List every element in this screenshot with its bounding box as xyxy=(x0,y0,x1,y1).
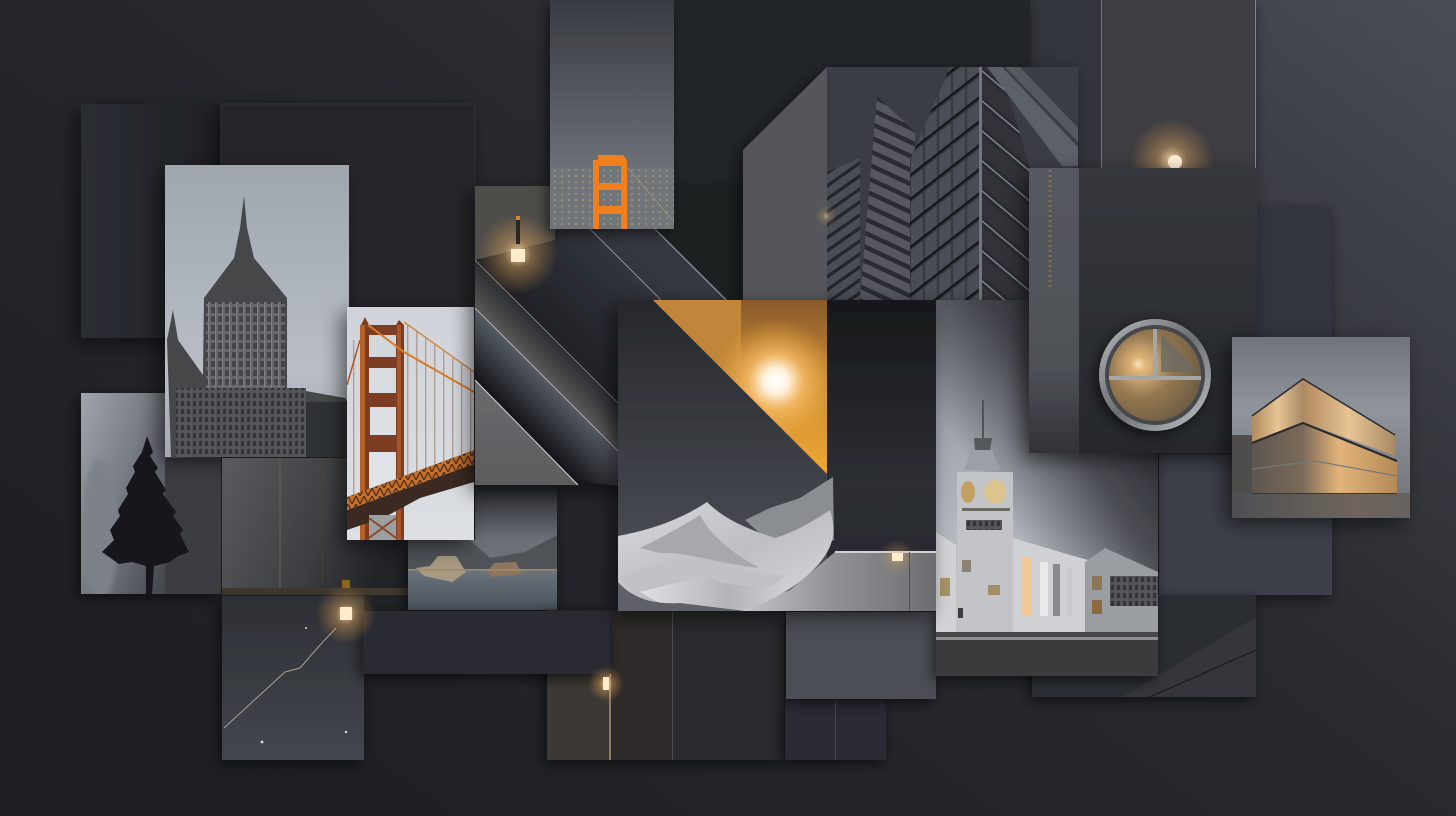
light: top glow xyxy=(1130,118,1214,202)
lamp: wall lantern top left xyxy=(478,214,558,294)
panel: speckled dark with spark xyxy=(222,596,364,760)
photo: golden gate bridge xyxy=(347,307,474,540)
panel: back right column xyxy=(1030,0,1256,170)
photo: modern high-rise xyxy=(743,67,1078,300)
photo: lit glass building xyxy=(1232,337,1410,518)
lamp: lower left lantern xyxy=(316,580,376,644)
lamp: slab sparkle xyxy=(588,666,624,702)
panel: top column xyxy=(674,0,1030,229)
panel: diagonal brushed metal xyxy=(454,186,742,504)
panel: grey square xyxy=(786,612,936,699)
panel: central dark with mountains xyxy=(618,300,936,611)
photo: gothic tower xyxy=(165,165,349,457)
panel: lower centre triple xyxy=(547,610,784,760)
photo: clock tower xyxy=(936,300,1158,676)
panel: top left dark slab xyxy=(221,104,475,458)
panel: top left brushed slab xyxy=(81,104,221,338)
panel: grey base with lamp xyxy=(733,539,936,611)
amber triangle with sun xyxy=(653,300,838,474)
mountains xyxy=(618,477,834,611)
panel: horizontal slab xyxy=(363,611,610,674)
icon: round porthole lamp xyxy=(1099,319,1211,431)
panel: concrete wall xyxy=(222,458,408,595)
panel: right back slab xyxy=(1159,208,1332,595)
photo: foggy tree xyxy=(81,393,221,602)
panel: small lower slab xyxy=(785,700,886,760)
panel: lower right hatched xyxy=(1032,595,1256,697)
photo: orange bridge on top column xyxy=(550,0,674,229)
photo: lake with boats xyxy=(408,486,557,610)
panel: right textured with round lamp xyxy=(1029,168,1257,453)
